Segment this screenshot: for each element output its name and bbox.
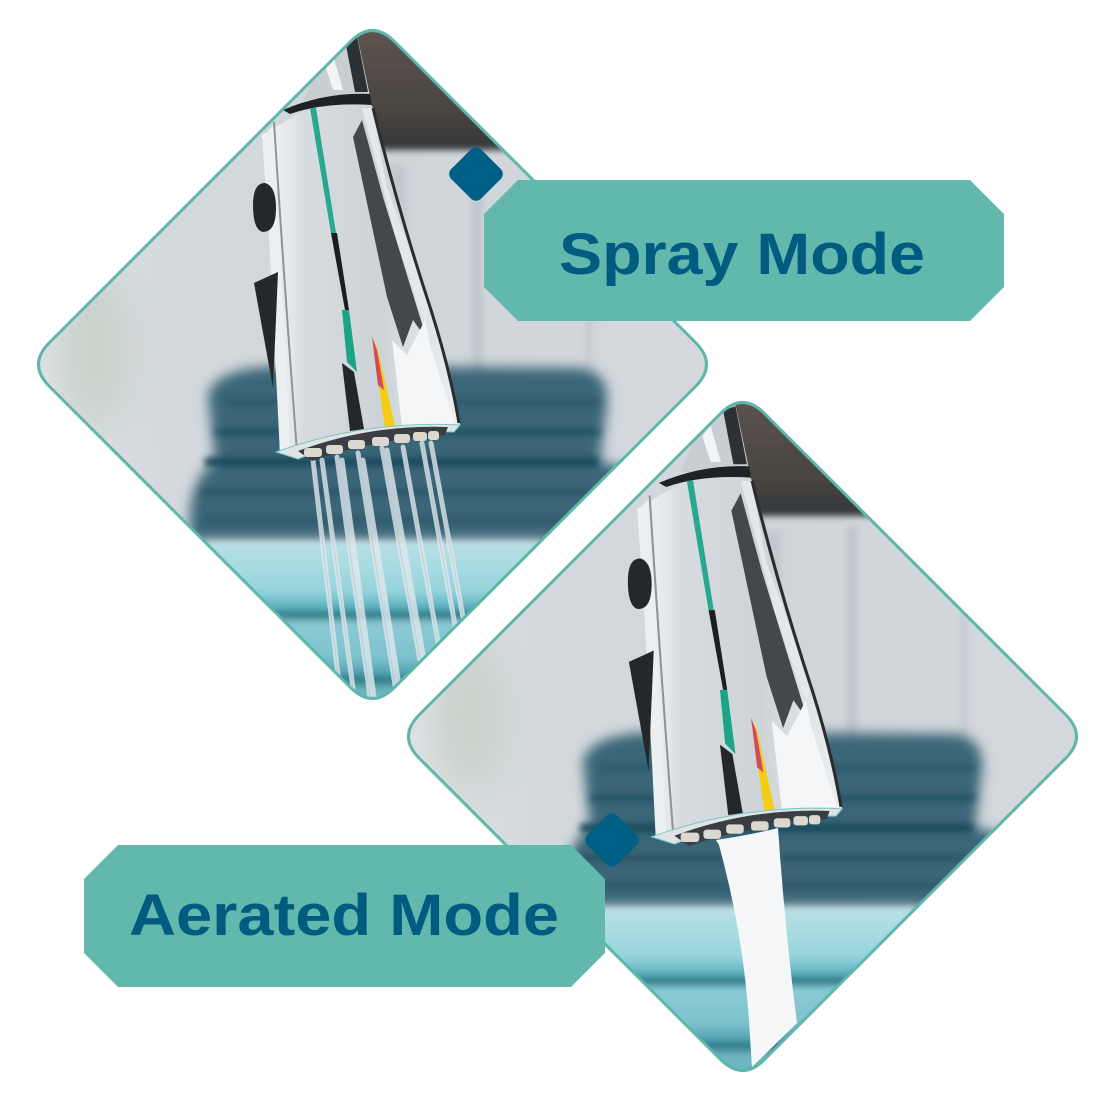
water streams: spray (313, 443, 463, 697)
panel: aerated mode photo (410, 404, 1075, 1069)
icon: faucet head, lower photo (628, 400, 842, 846)
label panel: spray mode: Spray Mode (559, 222, 925, 287)
panel border: spray mode (38, 30, 706, 698)
panel border: aerated mode (408, 402, 1076, 1070)
water stream: aerated (716, 828, 797, 1067)
blurred towel background (40, 32, 705, 697)
label panel: aerated mode (84, 845, 605, 987)
label panel: spray mode (484, 180, 1004, 321)
icon: accent diamond top (446, 144, 506, 204)
label panel: aerated mode: Aerated Mode (129, 883, 559, 948)
icon: accent diamond bottom (582, 810, 642, 870)
blurred towel background, lower photo (410, 404, 1075, 1069)
icon: faucet head (253, 30, 460, 461)
panel: spray mode photo (40, 32, 705, 697)
